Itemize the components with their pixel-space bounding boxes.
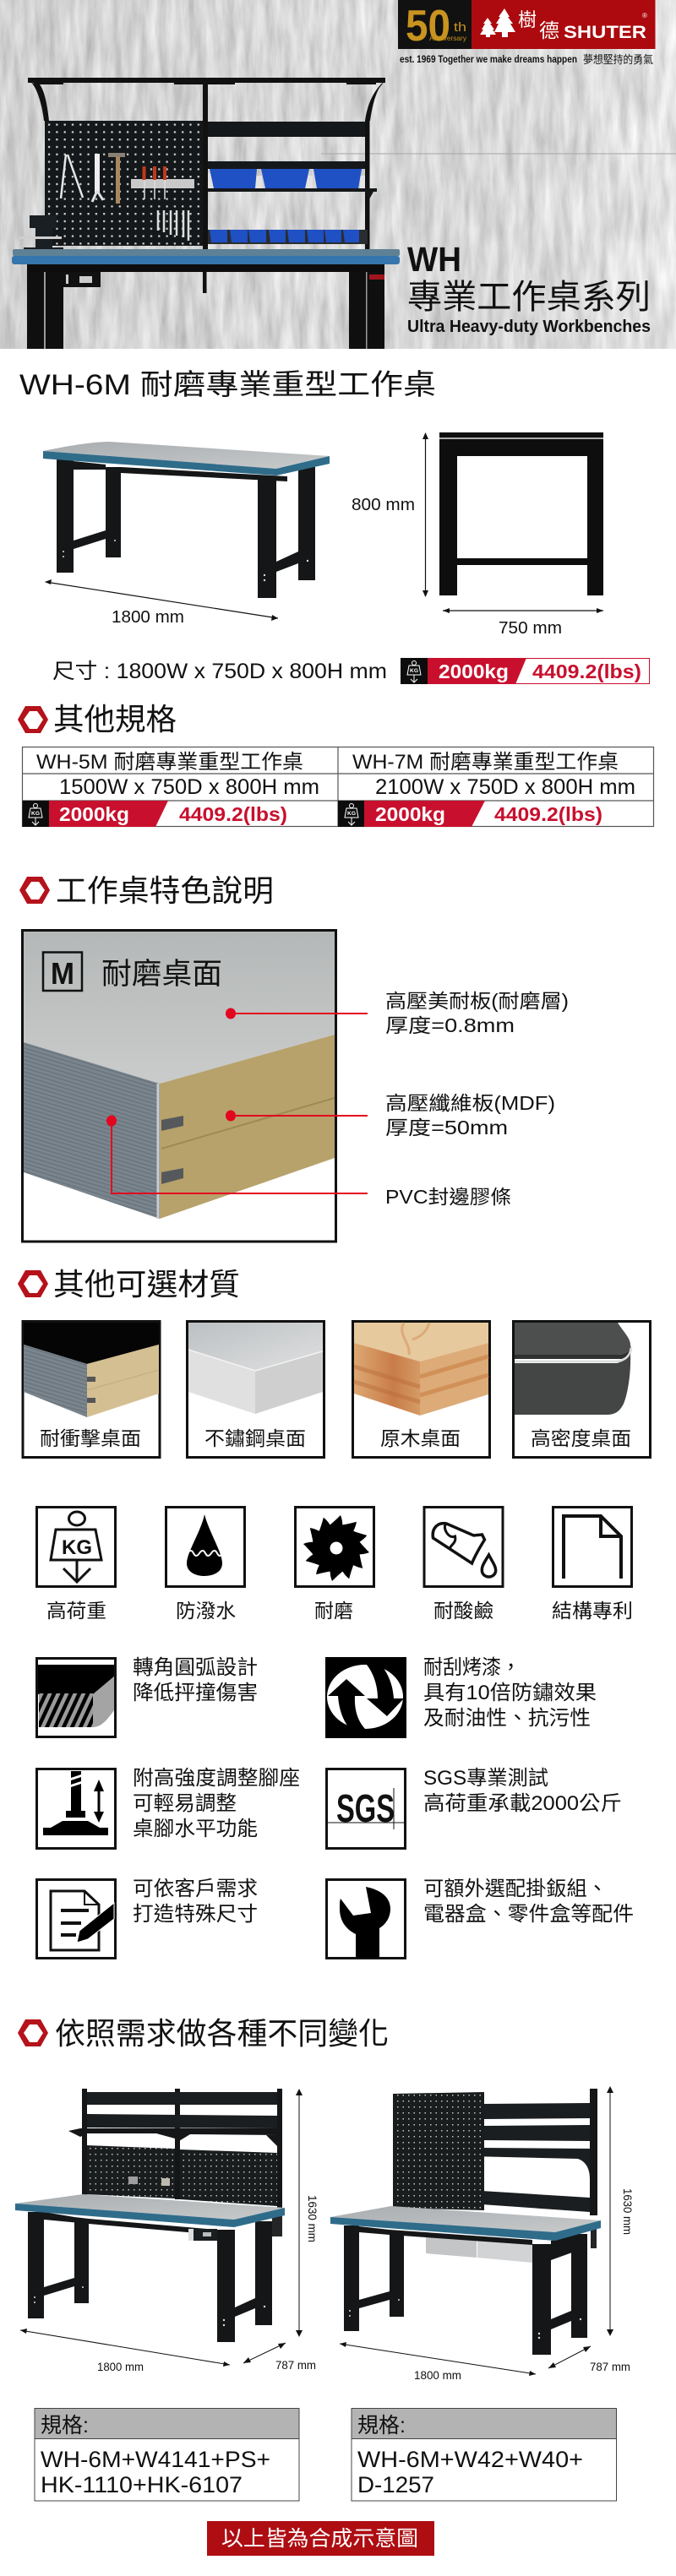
spec box B (352, 2409, 617, 2501)
icon: structural patent (553, 1507, 632, 1586)
label: structural patent: 結構專利 (552, 1600, 633, 1622)
feature: custom sizes (37, 1878, 258, 1958)
icon: waterproof (166, 1507, 245, 1586)
feature: rounded corner: 轉角圓弧設計 (133, 1656, 258, 1679)
feature: optional accessories: 電器盒、零件盒等配件 (423, 1903, 634, 1926)
arrow: height dimension (422, 432, 428, 597)
feature: SGS testing: 高荷重承載2000公斤 (423, 1792, 622, 1815)
label: B 1630 mm: 1630 mm (621, 2188, 635, 2235)
size text: 尺寸 : 1800W x 750D x 800H mm (52, 660, 387, 683)
load capacity badge: 4409.2(lbs) (532, 660, 641, 682)
label: A 787 mm: 787 mm (275, 2358, 316, 2372)
icon: document and pen (37, 1880, 115, 1958)
feature: SGS testing: SGS專業測試 (423, 1767, 548, 1790)
icon: SGS (326, 1769, 406, 1848)
callout: laminate layer (226, 990, 569, 1036)
arrow: A width (20, 2329, 230, 2367)
WH-5M load badge (22, 801, 287, 827)
callout: laminate layer: 高壓美耐板(耐磨層) (385, 990, 569, 1012)
card: stainless steel top (188, 1321, 324, 1458)
label: 1800 mm: 1800 mm (112, 608, 184, 627)
card: impact-resistant top (23, 1321, 160, 1458)
workbench side view (439, 432, 603, 595)
heading: other materials: 其他可選材質 (53, 1267, 240, 1302)
card: high-density top: 高密度桌面 (531, 1427, 631, 1449)
label: 750 mm: 750 mm (499, 619, 562, 638)
WH-7M load badge: 4409.2(lbs) (494, 803, 602, 825)
feature: scratch and rust resistant paint: 具有10倍防鏽效果 (423, 1682, 597, 1704)
feature: SGS testing (326, 1767, 622, 1848)
card: solid wood top: 原木桌面 (380, 1427, 461, 1449)
note button (207, 2521, 434, 2556)
WH-7M load badge (338, 801, 602, 827)
WH-5M load badge: 2000kg (59, 803, 129, 825)
WH-7M load badge: KG (347, 811, 356, 817)
logo tagline: est. 1969 Together we make dreams happen (400, 53, 577, 65)
heading: other specifications: 其他規格 (53, 702, 177, 736)
WH-7M size: 2100W x 750D x 800H mm (375, 775, 635, 799)
card: stainless steel top: 不鏽鋼桌面 (204, 1427, 306, 1449)
icon: acid and alkali resistant (424, 1507, 503, 1586)
workbench with pegboard and shelves (12, 78, 400, 349)
banner title: WH (407, 240, 461, 279)
WH-7M name: WH-7M 耐磨專業重型工作桌 (352, 751, 619, 774)
logo: 50th anniversary and SHUTER: 德 (539, 19, 559, 41)
other specifications table (22, 747, 654, 827)
workbench variation B (330, 2089, 601, 2355)
icon: recycling arrows (325, 1657, 406, 1738)
card: high-density top (514, 1321, 651, 1458)
label: waterproof: 防潑水 (176, 1600, 236, 1622)
spec box A (35, 2409, 299, 2501)
logo: 50th anniversary and SHUTER: ® (642, 12, 647, 19)
workbench perspective drawing (43, 442, 330, 598)
callout: MDF core: 高壓纖維板(MDF) (385, 1092, 555, 1114)
panel: wear-resistant tabletop cross-section (22, 931, 336, 1242)
feature: scratch and rust resistant paint: 耐刮烤漆， (423, 1656, 521, 1679)
arrow: B height (607, 2086, 613, 2336)
label: B 787 mm: 787 mm (590, 2360, 630, 2373)
feature: adjustable foot (37, 1767, 300, 1848)
icon: wear-resistant saw blade (296, 1507, 373, 1586)
logo: 50th anniversary and SHUTER: 樹 (518, 9, 537, 30)
spec box A: HK-1110+HK-6107 (41, 2472, 243, 2497)
feature: adjustable foot: 桌腳水平功能 (133, 1818, 258, 1840)
load capacity badge: KG (410, 668, 418, 674)
arrow: A depth (243, 2343, 286, 2363)
logo: 50th anniversary and SHUTER: 50 (406, 2, 450, 51)
icon: wrench (326, 1880, 406, 1958)
feature: scratch and rust resistant paint: 及耐油性、抗污性 (423, 1707, 591, 1730)
callout: laminate layer: 厚度=0.8mm (385, 1014, 515, 1036)
load capacity badge (401, 658, 649, 684)
heading: workbench features: 工作桌特色說明 (56, 873, 274, 908)
label: 800 mm: 800 mm (352, 496, 415, 514)
product title: WH-6M 耐磨專業重型工作桌 (19, 369, 436, 401)
card: impact-resistant top: 耐衝擊桌面 (40, 1427, 141, 1449)
label: wear-resistant: 耐磨 (314, 1600, 353, 1622)
WH-7M load badge: 2000kg (375, 803, 445, 825)
arrow: B depth (548, 2346, 591, 2368)
load capacity badge: 2000kg (439, 660, 509, 682)
hero banner photo (0, 0, 676, 349)
label: high load: 高荷重 (46, 1600, 106, 1622)
icon: rounded corner (37, 1659, 115, 1736)
icon: M badge: M (51, 956, 74, 991)
icon: high load: KG (62, 1536, 92, 1559)
feature: adjustable foot: 可輕易調整 (133, 1792, 237, 1815)
spec box B: D-1257 (357, 2472, 434, 2497)
spec box B: 規格: (357, 2414, 406, 2437)
logo: 50th anniversary and SHUTER: SHUTER (564, 23, 646, 42)
feature: scratch and rust resistant paint (325, 1656, 597, 1738)
feature: rounded corner: 降低抨撞傷害 (133, 1682, 258, 1704)
callout: PVC edge strip (106, 1115, 511, 1208)
arrow: B width (340, 2342, 536, 2376)
spec box A: WH-6M+W4141+PS+ (41, 2447, 270, 2472)
feature: rounded corner (37, 1656, 258, 1736)
feature: adjustable foot: 附高強度調整腳座 (133, 1767, 300, 1790)
label: A 1630 mm: 1630 mm (306, 2195, 319, 2242)
panel title: 耐磨桌面 (101, 958, 222, 991)
callout: MDF core: 厚度=50mm (385, 1117, 508, 1139)
label: acid and alkali resistant: 耐酸鹼 (433, 1600, 493, 1622)
feature: custom sizes: 打造特殊尺寸 (133, 1903, 258, 1926)
arrow: A height (296, 2089, 303, 2337)
label: A 1800 mm: 1800 mm (97, 2360, 144, 2373)
icon: M badge (43, 953, 82, 991)
icon: high load (37, 1507, 115, 1586)
WH-5M load badge: 4409.2(lbs) (179, 803, 287, 825)
callout: MDF core (226, 1092, 555, 1139)
icon: SGS: SGS (336, 1786, 395, 1830)
note button: 以上皆為合成示意圖 (221, 2527, 418, 2551)
logo: 50th anniversary and SHUTER: Anniversary (429, 35, 466, 42)
feature: optional accessories: 可額外選配掛鈑組、 (423, 1878, 608, 1900)
arrow: depth dimension (443, 608, 603, 613)
feature: optional accessories (326, 1878, 634, 1958)
banner title (407, 240, 651, 336)
logo tagline: 夢想堅持的勇氣 (583, 53, 653, 66)
banner title: Ultra Heavy-duty Workbenches (407, 318, 651, 336)
WH-5M name: WH-5M 耐磨專業重型工作桌 (36, 751, 303, 774)
spec box A: 規格: (41, 2414, 89, 2437)
workbench variation A (15, 2089, 285, 2342)
callout: PVC edge strip: PVC封邊膠條 (385, 1186, 511, 1208)
heading: variations: 依照需求做各種不同變化 (55, 2016, 389, 2051)
logo: 50th anniversary and SHUTER (398, 0, 656, 51)
logo: 50th anniversary and SHUTER: th (454, 20, 466, 35)
spec box B: WH-6M+W42+W40+ (357, 2447, 583, 2472)
feature: custom sizes: 可依客戶需求 (133, 1878, 258, 1900)
icon: adjustable foot (37, 1769, 115, 1848)
banner title: 專業工作桌系列 (407, 279, 651, 316)
card: solid wood top (353, 1321, 490, 1458)
WH-5M load badge: KG (31, 811, 40, 817)
WH-5M size: 1500W x 750D x 800H mm (59, 775, 319, 799)
arrow: width dimension (45, 579, 278, 621)
label: B 1800 mm: 1800 mm (414, 2368, 461, 2382)
